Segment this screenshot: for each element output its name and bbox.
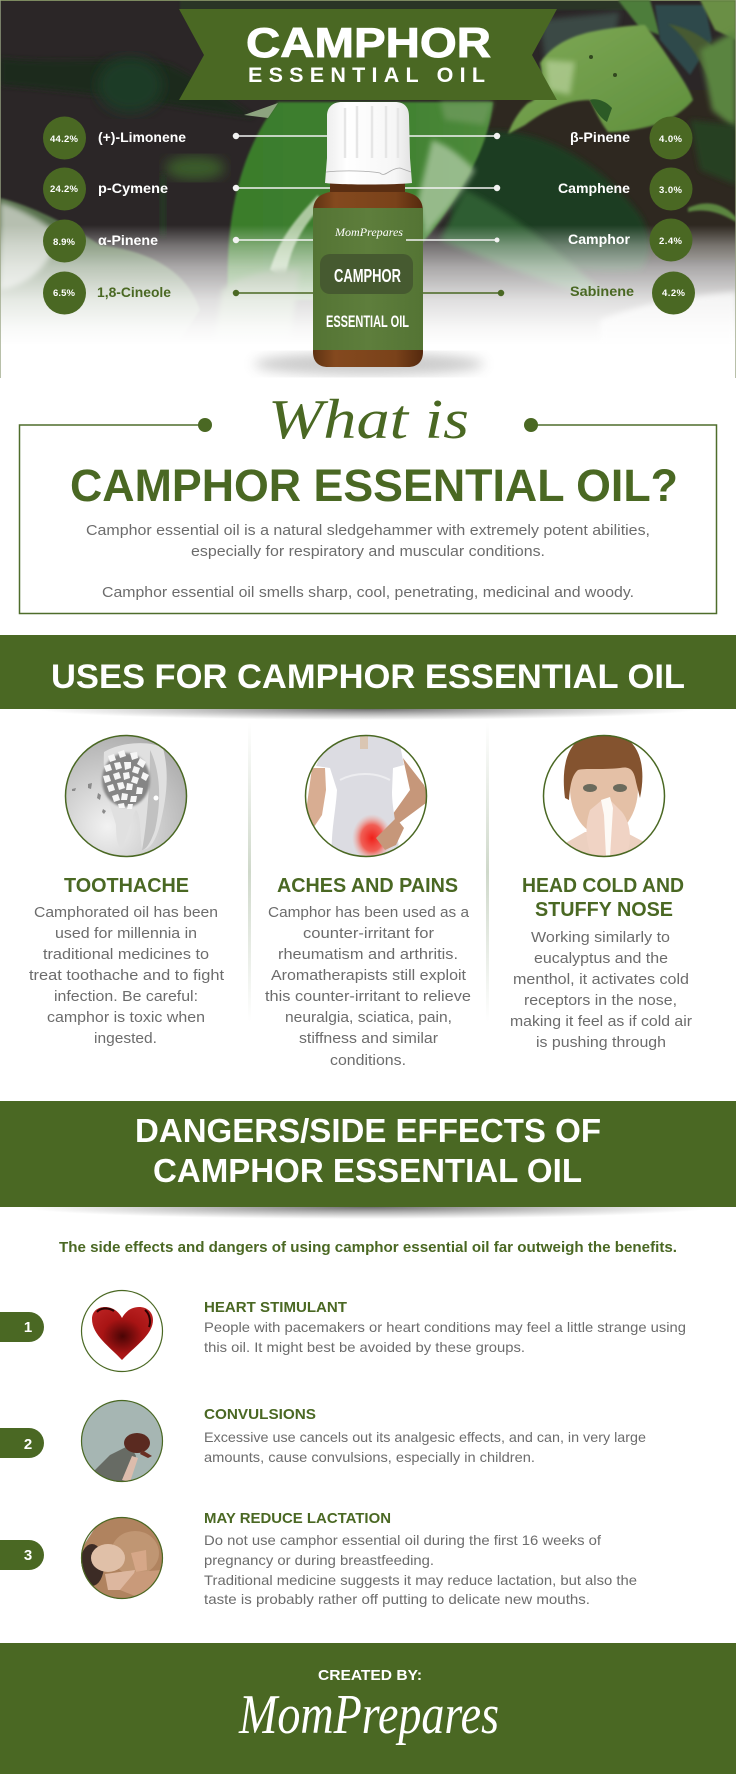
danger 3: lactation	[0, 1510, 637, 1607]
compounds right: 2.4%	[659, 236, 683, 247]
compounds left: p-Cymene	[98, 180, 168, 196]
compounds left	[43, 116, 186, 314]
leaf: central	[228, 102, 493, 300]
text: Excessive use cancels out its analgesic effects, and can, in very large	[204, 1429, 646, 1445]
top right foliage	[540, 12, 620, 60]
number tab 1	[0, 1312, 44, 1342]
icon: woman blowing nose	[543, 732, 665, 860]
compounds right: 3.0%	[659, 185, 683, 196]
number tab 2: 2	[24, 1436, 32, 1453]
text: toothache	[29, 904, 225, 1047]
bottle	[313, 102, 500, 367]
banner: title	[179, 9, 557, 100]
text: toothache: camphor is toxic when	[47, 1009, 205, 1026]
title: camphor: CAMPHOR	[246, 19, 491, 66]
text: toothache: infection. Be careful:	[54, 988, 198, 1005]
number tab 3	[0, 1540, 44, 1570]
compounds right: Camphene	[558, 180, 630, 196]
text: head cold: making it feel as if cold air	[510, 1013, 692, 1030]
white fade	[0, 225, 736, 345]
heading: aches and pains: ACHES AND PAINS	[277, 875, 458, 897]
bottle glass	[313, 183, 423, 367]
text: aches and pains: rheumatism and arthritis.	[278, 946, 458, 963]
number tab 1: 1	[24, 1319, 32, 1336]
text: toothache: Camphorated oil has been	[34, 904, 218, 921]
use: aches and pains	[265, 735, 471, 1069]
text: toothache: traditional medicines to	[43, 946, 209, 963]
text: Traditional medicine suggests it may reduce lactation, but also the	[204, 1572, 637, 1588]
top strip	[180, 1, 624, 10]
compounds left: 8.9%	[53, 237, 76, 248]
text	[204, 1429, 646, 1465]
compounds left: 6.5%	[53, 288, 76, 299]
panel: header photo	[0, 0, 736, 378]
text: aches and pains: stiffness and similar	[299, 1030, 438, 1047]
number tab 3: 3	[24, 1547, 32, 1564]
compounds right	[558, 116, 695, 314]
text: amounts, cause convulsions, especially in children.	[204, 1449, 535, 1465]
text: head cold: eucalyptus and the	[534, 950, 668, 967]
text: this oil. It might best be avoided by these groups.	[204, 1339, 525, 1355]
heading: toothache: TOOTHACHE	[64, 875, 189, 897]
compounds right: β-Pinene	[570, 129, 630, 145]
text: People with pacemakers or heart conditions may feel a little strange using	[204, 1319, 686, 1335]
description: Camphor essential oil is a natural sledgehammer with extremely potent abilities,	[86, 522, 650, 539]
heading: head cold: HEAD COLD AND	[522, 875, 684, 897]
compounds left: 1,8-Cineole	[97, 284, 171, 300]
label box	[320, 254, 413, 294]
heading: MAY REDUCE LACTATION	[204, 1510, 391, 1527]
section banner: uses: USES FOR CAMPHOR ESSENTIAL OIL	[51, 658, 685, 696]
panel: what is	[20, 389, 716, 614]
compounds left: 24.2%	[50, 184, 79, 195]
text: aches and pains	[265, 904, 471, 1069]
text: aches and pains: this counter-irritant to relieve	[265, 988, 471, 1005]
text: toothache: treat toothache and to fight	[29, 967, 225, 984]
leaf: lower left silver	[0, 197, 198, 310]
text: head cold: Working similarly to	[531, 929, 670, 946]
description: Camphor essential oil smells sharp, cool, penetrating, medicinal and woody.	[102, 584, 634, 601]
text: aches and pains: conditions.	[330, 1052, 406, 1069]
subtitle: essential oil: ESSENTIAL OIL	[248, 63, 485, 87]
heading: camphor essential oil: CAMPHOR ESSENTIAL OIL?	[70, 460, 678, 511]
dark leaves left	[0, 58, 255, 118]
section banner: dangers: CAMPHOR ESSENTIAL OIL	[153, 1152, 582, 1189]
section banner: dangers: DANGERS/SIDE EFFECTS OF	[135, 1112, 601, 1149]
text	[204, 1532, 637, 1607]
leaf: dark right	[451, 131, 649, 271]
text: toothache: used for millennia in	[55, 925, 197, 942]
icon: broken tooth	[65, 735, 187, 857]
bottle shadow	[254, 353, 484, 375]
use: head cold	[510, 732, 692, 1051]
compounds right: Camphor	[568, 231, 631, 247]
text: Do not use camphor essential oil during the first 16 weeks of	[204, 1532, 601, 1548]
section banner: dangers	[0, 1101, 736, 1219]
soft highlight right	[606, 290, 735, 324]
text: toothache: ingested.	[94, 1030, 157, 1047]
column dividers	[248, 722, 489, 1022]
section banner: uses	[0, 635, 736, 720]
compounds left: (+)-Limonene	[98, 129, 186, 145]
text: aches and pains: counter-irritant for	[303, 925, 434, 942]
leaf: upper right	[508, 25, 693, 134]
number tab 2	[0, 1428, 44, 1458]
text: taste is probably rather off putting to delicate new mouths.	[204, 1591, 590, 1607]
heading: what is: What is	[268, 389, 469, 451]
leaf: far right sprig	[688, 203, 736, 222]
footer	[0, 1643, 736, 1774]
text: aches and pains: Camphor has been used as a	[268, 904, 470, 921]
label: essential oil: ESSENTIAL OIL	[326, 312, 409, 331]
description: especially for respiratory and muscular conditions.	[191, 543, 545, 560]
compounds left: 44.2%	[50, 134, 79, 145]
brand: MomPrepares	[238, 1684, 499, 1746]
text	[204, 1319, 686, 1355]
text: head cold: is pushing through	[536, 1034, 666, 1051]
compounds right: 4.0%	[659, 134, 683, 145]
label: camphor: CAMPHOR	[334, 265, 401, 286]
bottle label	[313, 208, 423, 350]
bottle cap	[325, 102, 412, 184]
text: head cold: menthol, it activates cold	[513, 971, 689, 988]
heading: head cold	[522, 875, 684, 921]
icon: nursing mother	[80, 1517, 163, 1599]
text: aches and pains: neuralgia, sciatica, pain,	[285, 1009, 452, 1026]
compounds right: Sabinene	[570, 283, 634, 299]
danger 1: heart stimulant	[0, 1290, 686, 1372]
compounds right: 4.2%	[662, 288, 686, 299]
compounds left: α-Pinene	[98, 232, 158, 248]
text: head cold: receptors in the nose,	[524, 992, 677, 1009]
text: pregnancy or during breastfeeding.	[204, 1552, 434, 1568]
intro sentence: The side effects and dangers of using camphor essential oil far outweigh the benefits.	[59, 1239, 677, 1256]
heading: HEART STIMULANT	[204, 1299, 347, 1316]
use: toothache	[29, 735, 225, 1047]
bottle brand: MomPrepares	[334, 225, 403, 239]
description	[86, 522, 650, 601]
icon: fallen figure	[81, 1400, 163, 1482]
heading: CONVULSIONS	[204, 1406, 316, 1423]
created by: CREATED BY:	[318, 1667, 422, 1684]
text: aches and pains: Aromatherapists still exploit	[271, 967, 467, 984]
heading: head cold: STUFFY NOSE	[535, 899, 673, 921]
icon: heart	[82, 1290, 162, 1372]
text: head cold	[510, 929, 692, 1051]
connector lines	[234, 134, 504, 296]
danger 2: convulsions	[0, 1400, 646, 1482]
icon: back pain	[304, 735, 430, 862]
